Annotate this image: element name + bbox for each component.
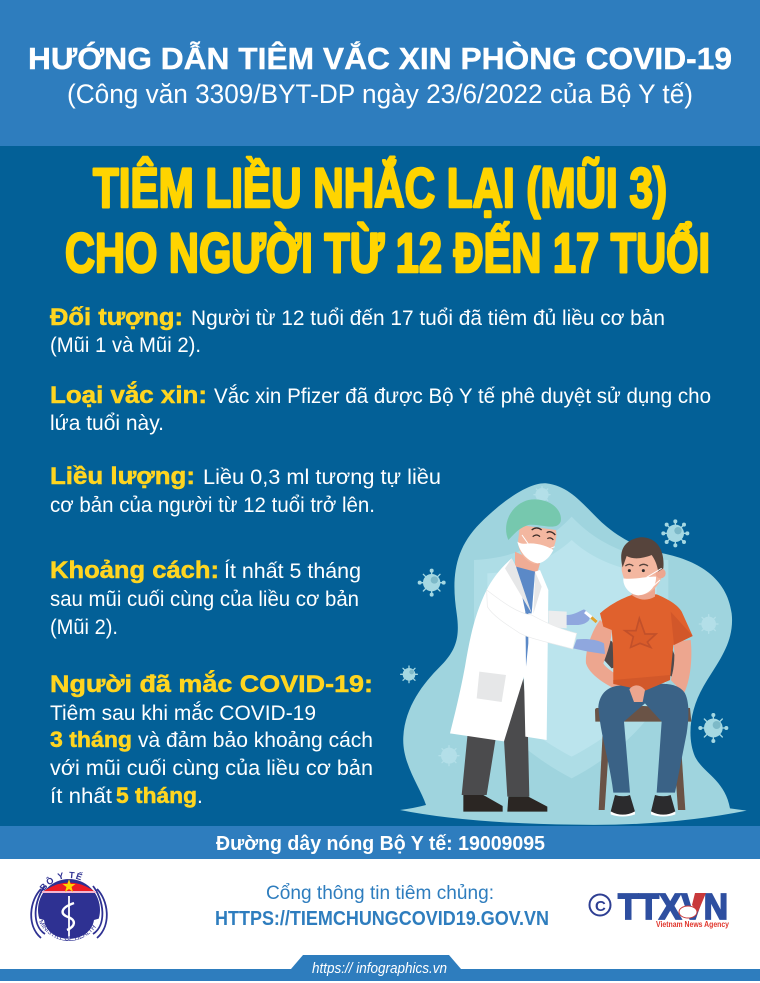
text block: khoảng cách: Khoảng cách: bbox=[50, 557, 219, 584]
text block: liều lượng: cơ bản của người từ 12 tuổi trở lên. bbox=[50, 494, 375, 517]
hotline band bbox=[0, 826, 760, 859]
patient mask bbox=[623, 577, 656, 595]
logo: Ministry of Health: BỘ Y TẾ bbox=[40, 872, 83, 891]
header band bbox=[0, 0, 760, 146]
head bbox=[518, 525, 556, 564]
shirt bbox=[600, 594, 693, 691]
gloves bbox=[573, 639, 605, 654]
text block: liều lượng: Liều 0,3 ml tương tự liều bbox=[203, 466, 441, 489]
hotline band: Đường dây nóng Bộ Y tế: 19009095 bbox=[216, 833, 545, 855]
text block: đối tượng: Người từ 12 tuổi đến 17 tuổi đã tiêm đủ liều cơ bản bbox=[191, 307, 665, 330]
arms bbox=[586, 620, 637, 694]
patient bbox=[586, 537, 693, 816]
logo: TTXVN: TTXVN bbox=[618, 886, 728, 927]
text block: người đã mắc COVID-19: Người đã mắc COVID-19: bbox=[50, 670, 373, 698]
text block: người đã mắc COVID-19: Tiêm sau khi mắc COVID-19 bbox=[50, 702, 316, 725]
text block: người đã mắc COVID-19 bbox=[50, 670, 373, 808]
text block: khoảng cách bbox=[50, 557, 361, 639]
illustration: doctor vaccinating a teenager bbox=[400, 483, 747, 825]
pocket bbox=[477, 672, 506, 702]
footer band bbox=[0, 955, 760, 981]
neck and head bbox=[632, 583, 655, 600]
doctor bbox=[450, 499, 605, 812]
scrub bbox=[516, 567, 535, 667]
hand bbox=[629, 685, 645, 702]
main heading bbox=[65, 156, 710, 284]
text block: khoảng cách: sau mũi cuối cùng của liều cơ bản bbox=[50, 588, 359, 611]
hair bbox=[621, 537, 664, 572]
syringe bbox=[585, 612, 597, 622]
text block: loại vắc xin bbox=[50, 381, 711, 435]
logo: Ministry of Health: MINISTRY OF HEALTH bbox=[38, 920, 96, 940]
text block: người đã mắc COVID-19: ít nhất bbox=[50, 785, 112, 808]
text block: khoảng cách: (Mũi 2). bbox=[50, 616, 118, 639]
shield bbox=[474, 517, 668, 778]
portal text: Cổng thông tin tiêm chủng: bbox=[266, 883, 494, 904]
neck bbox=[515, 552, 540, 575]
text block: đối tượng bbox=[50, 304, 665, 357]
text block: loại vắc xin: Loại vắc xin: bbox=[50, 381, 207, 409]
portal text: HTTPS://TIEMCHUNGCOVID19.GOV.VN bbox=[215, 908, 549, 930]
doctor mask bbox=[517, 542, 553, 563]
coat bbox=[450, 558, 548, 741]
logo: TTXVN: Vietnam News Agency bbox=[656, 919, 729, 929]
text block: người đã mắc COVID-19: . bbox=[197, 785, 203, 808]
doctor shoes bbox=[463, 795, 503, 812]
text block: khoảng cách: Ít nhất 5 tháng bbox=[224, 560, 361, 583]
text block: liều lượng: Liều lượng: bbox=[50, 463, 195, 490]
title: HƯỚNG DẪN TIÊM VẮC XIN PHÒNG COVID-19 bbox=[28, 40, 732, 76]
legs bbox=[598, 684, 688, 793]
text block: liều lượng bbox=[50, 463, 441, 517]
text block: đối tượng: Đối tượng: bbox=[50, 304, 183, 331]
logo: Ministry of Health bbox=[30, 872, 108, 941]
virus icons bbox=[401, 520, 728, 742]
text block: người đã mắc COVID-19: và đảm bảo khoảng cách bbox=[138, 729, 373, 752]
footer band: https:// infographics.vn bbox=[312, 960, 447, 977]
patient chair bbox=[595, 640, 691, 810]
collar bbox=[505, 558, 542, 614]
text block: loại vắc xin: lứa tuổi này. bbox=[50, 412, 164, 435]
text block: người đã mắc COVID-19: 3 tháng bbox=[50, 727, 132, 752]
trousers bbox=[462, 677, 529, 797]
portal text bbox=[215, 883, 549, 930]
arm bbox=[487, 590, 577, 649]
background blob bbox=[400, 483, 747, 825]
text block: đối tượng: (Mũi 1 và Mũi 2). bbox=[50, 334, 201, 357]
text block: loại vắc xin: Vắc xin Pfizer đã được Bộ Y tế phê duyệt sử dụng cho bbox=[214, 385, 711, 408]
main panel background bbox=[0, 146, 760, 826]
shoes bbox=[611, 795, 635, 815]
subtitle: (Công văn 3309/BYT-DP ngày 23/6/2022 của Bộ Y tế) bbox=[67, 79, 693, 109]
doctor cap bbox=[506, 499, 561, 540]
text block: người đã mắc COVID-19: với mũi cuối cùng của liều cơ bản bbox=[50, 757, 373, 780]
text block: người đã mắc COVID-19: 5 tháng bbox=[116, 783, 197, 808]
logo: TTXVN: C bbox=[595, 898, 606, 915]
cuff bbox=[548, 611, 567, 628]
